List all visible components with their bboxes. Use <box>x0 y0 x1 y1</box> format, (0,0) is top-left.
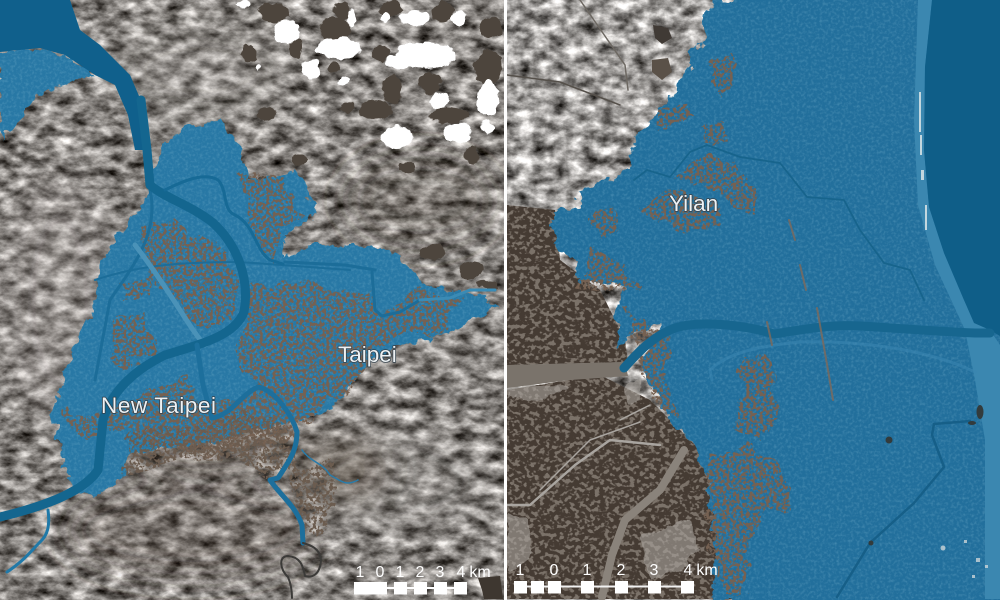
scale bar: Taipei panel: 2 <box>416 564 425 581</box>
roads and channels <box>507 0 660 505</box>
scale bar: Taipei panel: 1 <box>396 564 405 581</box>
dredged brown lines <box>767 220 833 400</box>
satellite terrain: northern Taiwan <box>0 0 504 600</box>
scale bar: Taipei panel: 3 <box>436 564 445 581</box>
scale bar: Taipei panel <box>354 564 491 594</box>
river: Xindian <box>197 345 303 543</box>
riverbed: Lanyang upstream <box>507 362 628 388</box>
cloud shadows <box>244 0 502 289</box>
river: Keelung <box>165 177 283 264</box>
satellite terrain: Yilan hills <box>507 0 734 600</box>
scale bar: Yilan panel: 2 <box>617 562 626 579</box>
dark hill patch <box>652 58 672 80</box>
sea <box>924 0 1000 336</box>
farmland: south of Lanyang river <box>507 378 716 599</box>
scale bar: Taipei panel: 0 <box>376 564 385 581</box>
river: upstream meander <box>281 543 321 598</box>
panel: Taipei and New Taipei flood map <box>0 0 504 600</box>
river: Lanyang main channel <box>624 324 990 368</box>
map label: Taipei: Taipei <box>338 342 397 367</box>
flood channels within New Taipei <box>95 190 495 380</box>
flood extent: Lanyang plain <box>554 0 1000 600</box>
scale bar: Yilan panel: 4 <box>684 562 693 579</box>
coastal settlements <box>940 540 988 578</box>
river: Yilan channel <box>634 145 924 300</box>
scale bar: Taipei panel: km <box>469 564 491 581</box>
scale bar: Yilan panel: 1 <box>583 562 592 579</box>
river: Tamsui <box>0 100 246 517</box>
farmland: north of Lanyang river <box>507 205 628 365</box>
urban fabric: Yilan city <box>577 56 757 295</box>
river: lighter southern side channel <box>710 342 975 380</box>
scale bar: Yilan panel <box>514 562 718 594</box>
scale bar: Yilan panel: 1 <box>516 562 525 579</box>
river: southwestern branch <box>7 510 49 572</box>
scale bar: Taipei panel: 4 <box>457 564 466 581</box>
flood base fill <box>735 0 1000 600</box>
pale gravel patches <box>507 380 700 580</box>
urban fabric: city wards <box>125 410 335 540</box>
coastal band <box>914 0 1000 599</box>
panel: Yilan flood map <box>507 0 1000 600</box>
urban fabric <box>60 170 465 455</box>
map label: Yilan: Yilan <box>669 191 718 216</box>
dark ponds <box>868 405 984 546</box>
reservoir: Yilan hills <box>653 25 672 44</box>
eastern tributaries <box>302 450 358 483</box>
scale bar: Yilan panel: 0 <box>550 562 559 579</box>
clouds <box>235 1 499 149</box>
farmland field texture <box>507 205 745 599</box>
estuary and lower Tamsui river water <box>0 0 150 150</box>
scale bar: Yilan panel: km <box>696 562 718 579</box>
urban fabric: Luodong <box>625 310 790 590</box>
terrain shading <box>0 20 500 580</box>
reservoir <box>478 576 503 599</box>
map label: New Taipei: New Taipei <box>101 393 217 418</box>
flood extent <box>0 48 498 495</box>
riverbed: southern tributary <box>602 450 684 597</box>
river: lower channel <box>837 421 970 597</box>
beach highlights <box>919 92 927 230</box>
scale bar: Yilan panel: 3 <box>650 562 659 579</box>
scale bar: Taipei panel: 1 <box>356 564 365 581</box>
